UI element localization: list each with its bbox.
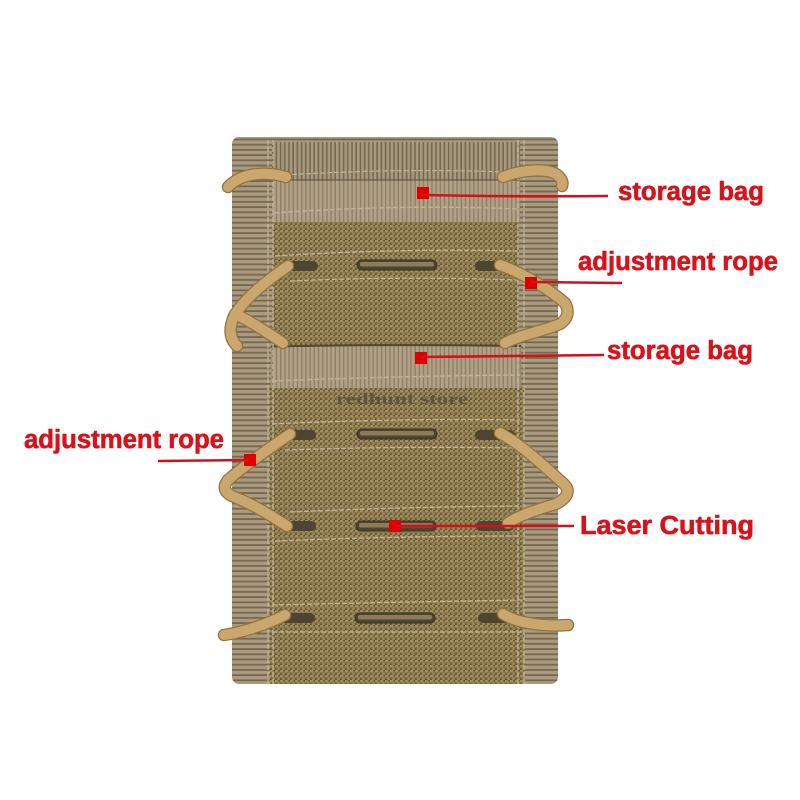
callout: adjustment rope left: adjustment rope — [24, 426, 224, 454]
pouch body — [232, 137, 558, 684]
panel: olive nylon lower — [270, 385, 524, 684]
watermark: redhunt store — [336, 391, 468, 408]
callout: storage bag middle: storage bag — [607, 337, 753, 365]
storage bag band lower — [271, 345, 521, 388]
storage bag band upper — [273, 171, 520, 222]
callout: adjustment rope left — [24, 426, 256, 466]
callout: laser cutting — [389, 512, 754, 540]
callout: laser cutting: Laser Cutting — [580, 512, 754, 540]
top webbing — [272, 142, 520, 182]
callout: storage bag top: storage bag — [618, 178, 764, 206]
laser cut slots — [280, 260, 515, 623]
callout: adjustment rope right: adjustment rope — [578, 248, 778, 276]
panel: olive nylon upper — [273, 220, 519, 348]
callout: storage bag middle — [415, 337, 753, 365]
callout: adjustment rope right — [525, 248, 778, 289]
adjustment ropes — [224, 170, 568, 635]
callout: storage bag top — [417, 178, 764, 206]
stitching — [268, 140, 524, 684]
